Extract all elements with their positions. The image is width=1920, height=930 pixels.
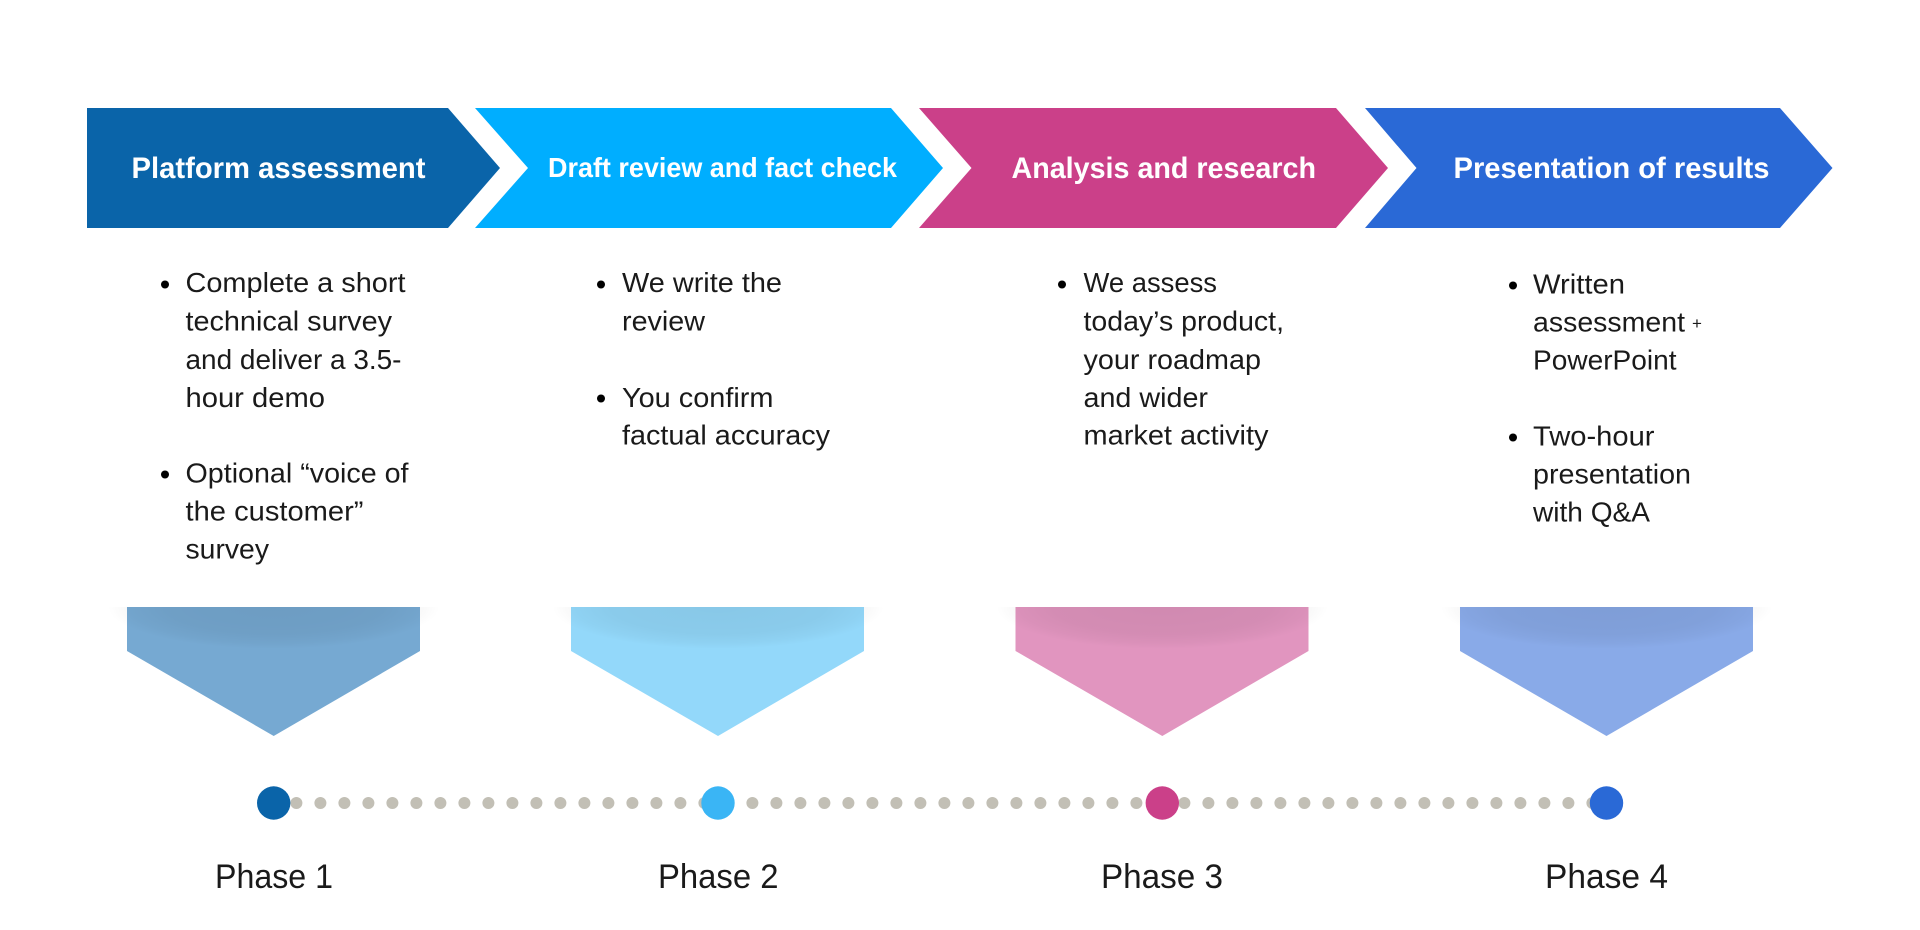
text block: phase 4 bullets (1509, 268, 1702, 528)
pentagon arrow: phase 2 (571, 607, 864, 736)
timeline: dotted line with phase markers (257, 786, 1623, 820)
text block: phase 2 bullets: review (622, 306, 705, 336)
text block: phase 2 bullets: factual accuracy (622, 420, 830, 450)
text block: phase 1 bullets: Optional “voice of (186, 458, 409, 488)
label: Phase 3: Phase 3 (1101, 858, 1223, 896)
chevron: Analysis and research (919, 108, 1388, 228)
chevron: Presentation of results (1365, 108, 1832, 228)
pentagon arrow: phase 4 (1460, 607, 1753, 736)
text block: phase 4 bullets: PowerPoint (1533, 344, 1677, 376)
label: Phase 2: Phase 2 (658, 858, 778, 896)
chevron: Analysis and research: Analysis and research (1012, 152, 1316, 185)
label: Phase 1: Phase 1 (215, 858, 333, 896)
text block: phase 4 bullets: Two-hour (1533, 420, 1654, 452)
text block: phase 1 bullets: survey (186, 534, 269, 564)
text block: phase 3 bullets: We assess (1084, 267, 1217, 298)
text block: phase 4 bullets: Written (1533, 268, 1625, 300)
text block: phase 3 bullets (1058, 267, 1284, 450)
text block: phase 3 bullets: market activity (1084, 420, 1269, 450)
text block: phase 4 bullets: presentation (1533, 458, 1691, 490)
text block: phase 1 bullets: the customer” (186, 496, 364, 526)
chevron: Presentation of results: Presentation of results (1454, 152, 1770, 185)
text block: phase 2 bullets: We write the (622, 267, 782, 298)
pentagon arrow: phase 3 (1016, 607, 1308, 736)
text block: phase 2 bullets (597, 267, 830, 450)
text block: phase 1 bullets: technical survey (186, 306, 392, 336)
chevron: Platform assessment: Platform assessment (132, 152, 426, 185)
text block: phase 4 bullets: assessment (1533, 306, 1685, 338)
text block: phase 3 bullets: your roadmap (1084, 344, 1261, 375)
chevron: Platform assessment (87, 108, 500, 228)
text block: phase 4 bullets: + (1692, 314, 1702, 333)
chevron: Draft review and fact check (475, 108, 943, 228)
text block: phase 3 bullets: and wider (1084, 382, 1208, 413)
pentagon arrow: phase 1 (127, 607, 420, 736)
chevron: Draft review and fact check: Draft review and fact check (548, 152, 898, 183)
process infographic (87, 108, 1832, 888)
text block: phase 3 bullets: today’s product, (1084, 306, 1284, 336)
text block: phase 1 bullets (161, 267, 409, 564)
text block: phase 1 bullets: hour demo (186, 382, 325, 413)
label: Phase 4: Phase 4 (1545, 858, 1668, 896)
text block: phase 1 bullets: and deliver a 3.5- (186, 344, 402, 375)
text block: phase 1 bullets: Complete a short (186, 267, 406, 298)
text block: phase 2 bullets: You confirm (622, 382, 774, 413)
text block: phase 4 bullets: with Q&A (1532, 496, 1651, 528)
